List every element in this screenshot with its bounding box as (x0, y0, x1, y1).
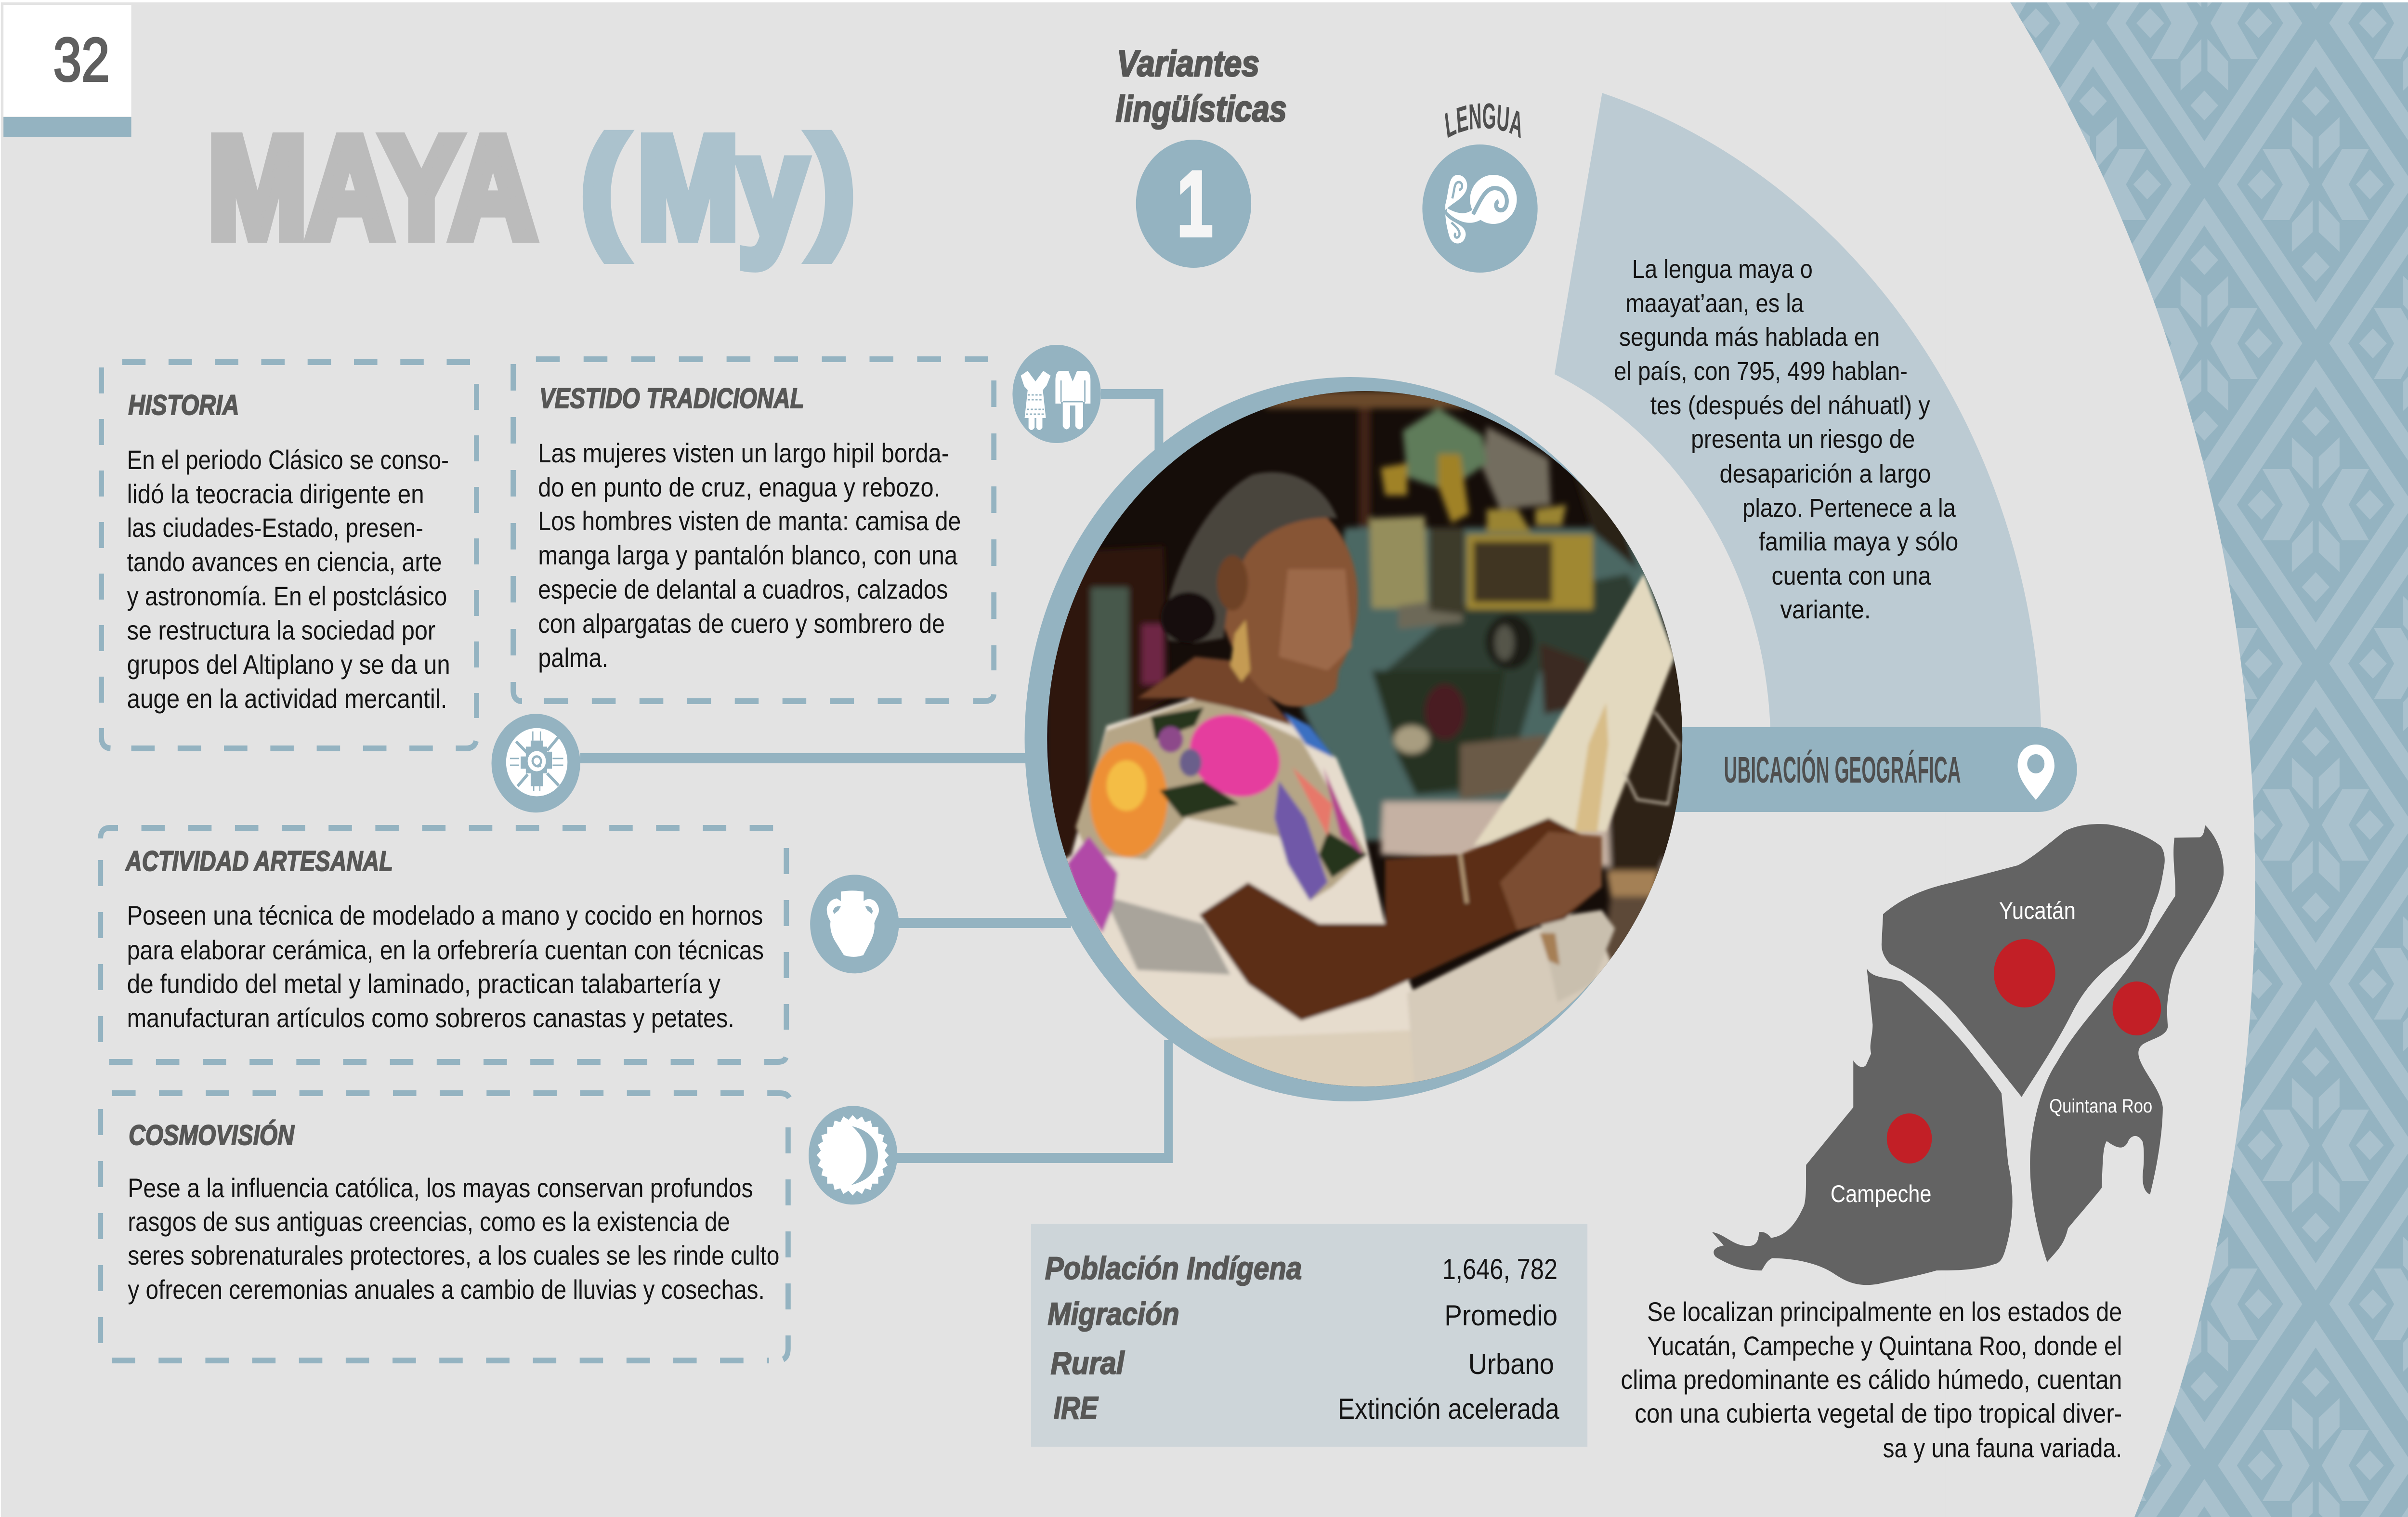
icon: location pin (2017, 745, 2055, 800)
title: MAYA (My): ) (811, 112, 854, 260)
text: vestido: manga larga y pantalón blanco, con una (538, 541, 957, 571)
text: cosmovisión: seres sobrenaturales protectores, a los cuales se les rinde culto (128, 1241, 779, 1271)
badge: number of variants: 1 (1177, 152, 1213, 256)
text: language description: tes (después del náhuatl) y (1650, 391, 1930, 420)
icon: clay jar (810, 875, 899, 973)
title: MAYA (My): My (638, 107, 807, 268)
text: historia: las ciudades-Estado, presen- (127, 513, 423, 543)
heading: vestido tradicional: VESTIDO TRADICIONAL (539, 382, 804, 414)
text: language description: el país, con 795, 499 hablan- (1614, 357, 1908, 386)
map: Yucatán peninsula (1712, 824, 2224, 1285)
labels: state names: Quintana Roo (2049, 1096, 2152, 1117)
text: actividad: para elaborar cerámica, en la orfebrería cuentan con técnicas (127, 936, 764, 966)
text: language description: desaparición a largo (1720, 459, 1931, 488)
title: MAYA (My): ( (581, 112, 626, 260)
labels: state names (1831, 898, 2152, 1208)
heading: variantes lingüísticas (1115, 44, 1287, 130)
stat labels: IRE (1054, 1390, 1099, 1426)
decorative textile pattern band (1950, 0, 2408, 1517)
text: geographic description (1621, 1297, 2122, 1464)
icon: sun and moon (809, 1106, 897, 1204)
dashed border: cosmovisión (101, 1093, 790, 1360)
dashed border: actividad (101, 828, 786, 1062)
icon: hunab ku (492, 714, 580, 812)
banner: ubicación geográfica: UBICACIÓN GEOGRÁFICA (1724, 749, 1961, 791)
text: language description (1614, 255, 1958, 624)
text: cosmovisión: rasgos de sus antiguas creencias, como es la existencia de (128, 1207, 730, 1237)
label: LENGUA: LENGUA (1445, 103, 1521, 138)
panel: statistics table (1031, 1224, 1587, 1447)
title: MAYA (My) (208, 107, 854, 268)
text: language description: familia maya y sólo (1758, 527, 1958, 556)
stat labels: Rural (1051, 1346, 1125, 1381)
text: historia: se restructura la sociedad por (127, 616, 435, 646)
connector lines (580, 389, 1173, 1163)
text: actividad: Poseen una técnica de modelado a mano y cocido en hornos (127, 901, 763, 931)
panel: actividad artesanal (101, 828, 786, 1062)
markers: state locations (1887, 939, 2161, 1164)
dashed border: historia (102, 362, 477, 748)
panel: cosmovisión (101, 1093, 790, 1360)
text: language description: variante. (1780, 595, 1871, 624)
text: historia: auge en la actividad mercantil. (127, 684, 447, 714)
icon: traditional clothing (1012, 345, 1101, 443)
panel: historia (102, 362, 477, 748)
stat values (1338, 1253, 1559, 1425)
stat values: Promedio (1444, 1299, 1557, 1332)
badge: number of variants (1136, 140, 1251, 268)
text: vestido (538, 439, 961, 673)
text: historia: y astronomía. En el postclásico (127, 582, 447, 612)
photo frame ring (1025, 377, 1676, 1101)
top margin strip (0, 0, 2408, 2)
labels: state names: Yucatán (1999, 898, 2076, 925)
stat labels: Población Indígena (1045, 1251, 1302, 1286)
stat values: Extinción acelerada (1338, 1393, 1559, 1425)
text: historia (127, 445, 450, 714)
large grey curved area (1945, 0, 2255, 1517)
text: language description: cuenta con una (1771, 562, 1931, 590)
text: cosmovisión: y ofrecen ceremonias anuales a cambio de lluvias y cosechas. (128, 1275, 765, 1305)
text: geographic description: clima predominante es cálido húmedo, cuentan (1621, 1365, 2122, 1395)
text: cosmovisión: Pese a la influencia católica, los mayas conservan profundos (128, 1174, 753, 1203)
page number tab (3, 5, 131, 137)
text: actividad: de fundido del metal y laminado, practican talabartería y (127, 969, 720, 999)
text: vestido: do en punto de cruz, enagua y rebozo. (538, 473, 940, 503)
text: historia: lidó la teocracia dirigente en (127, 480, 424, 510)
title: MAYA (My): MAYA (208, 107, 536, 268)
text: vestido: con alpargatas de cuero y sombrero de (538, 609, 945, 639)
heading: cosmovisión: COSMOVISIÓN (129, 1119, 295, 1151)
text: language description: La lengua maya o (1632, 255, 1813, 284)
text: historia: En el periodo Clásico se conso- (127, 445, 449, 475)
heading: variantes lingüísticas: lingüísticas (1115, 89, 1287, 130)
page number tab: 32 (53, 25, 110, 94)
labels: state names: Campeche (1831, 1181, 1931, 1208)
heading: variantes lingüísticas: Variantes (1117, 44, 1259, 84)
text: actividad (127, 901, 764, 1033)
text: cosmovisión (128, 1174, 779, 1305)
icon: speech scroll (1422, 144, 1538, 273)
text: vestido: especie de delantal a cuadros, calzados (538, 575, 948, 605)
stat values: Urbano (1468, 1348, 1554, 1381)
stat labels: Migración (1047, 1296, 1179, 1332)
text: actividad: manufacturan artículos como sobreros canastas y petates. (127, 1004, 734, 1033)
text: vestido: Las mujeres visten un largo hipil borda- (538, 439, 949, 469)
text: geographic description: con una cubierta vegetal de tipo tropical diver- (1635, 1399, 2122, 1429)
text: vestido: Los hombres visten de manta: camisa de (538, 507, 961, 536)
text: language description: plazo. Pertenece a la (1742, 494, 1956, 523)
heading: historia: HISTORIA (128, 389, 239, 421)
text: vestido: palma. (538, 643, 608, 673)
text: language description: segunda más hablada en (1619, 323, 1880, 352)
text: geographic description: Se localizan principalmente en los estados de (1647, 1297, 2122, 1327)
heading: actividad artesanal: ACTIVIDAD ARTESANAL (125, 845, 393, 877)
text: geographic description: sa y una fauna variada. (1883, 1434, 2122, 1464)
text: historia: tando avances en ciencia, arte (127, 548, 442, 577)
panel: language wedge (1555, 93, 2041, 727)
panel: vestido tradicional (513, 359, 994, 701)
photo: woman weaving a hammock (1040, 385, 1689, 1103)
left margin strip (0, 0, 1, 1517)
dashed border: vestido (513, 359, 994, 701)
text: language description: maayat’aan, es la (1625, 289, 1804, 318)
text: historia: grupos del Altiplano y se da un (127, 650, 450, 680)
stat values: 1,646, 782 (1442, 1253, 1557, 1286)
stat labels (1045, 1251, 1302, 1426)
text: geographic description: Yucatán, Campeche y Quintana Roo, donde el (1647, 1332, 2122, 1361)
banner: ubicación geográfica (1646, 727, 2077, 812)
text: language description: presenta un riesgo de (1691, 425, 1915, 454)
